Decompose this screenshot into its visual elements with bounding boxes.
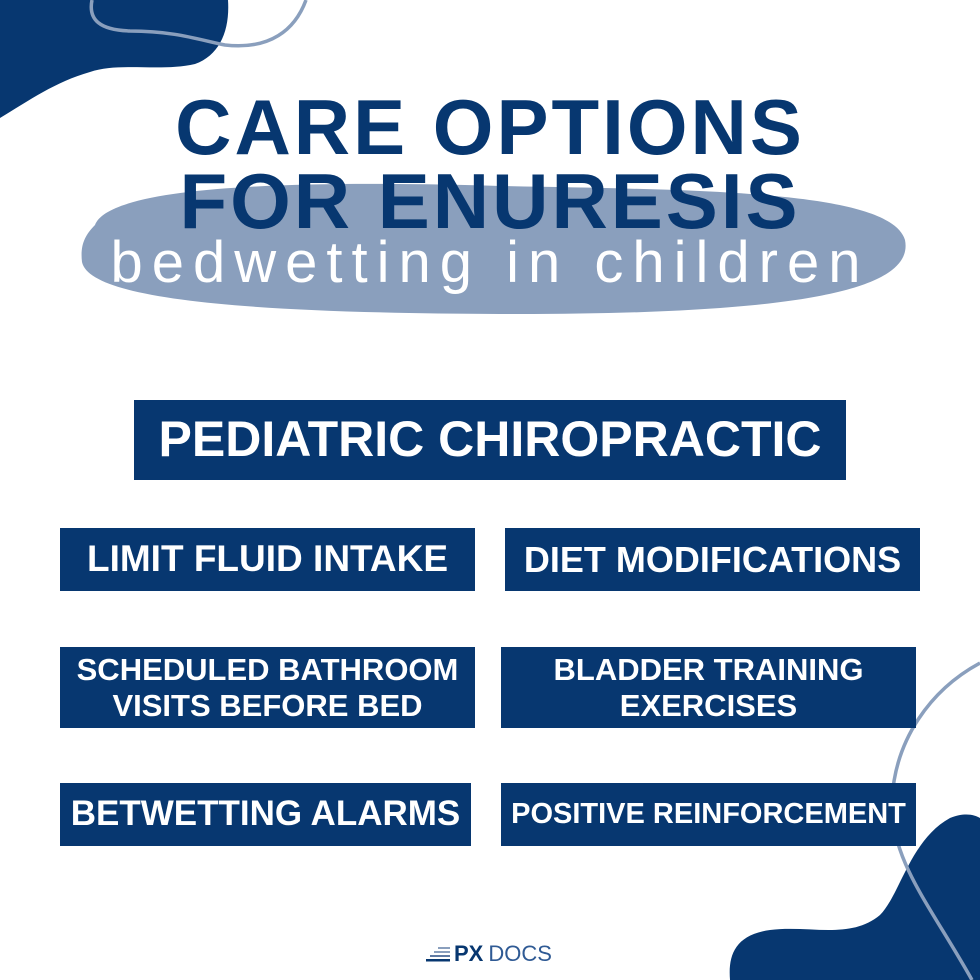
box: positive reinforcement: POSITIVE REINFORCEMENT xyxy=(511,798,906,830)
box: diet modifications xyxy=(505,528,920,591)
box: positive reinforcement xyxy=(501,783,916,846)
box: scheduled bathroom visits xyxy=(60,647,475,728)
box: limit fluid intake xyxy=(60,528,475,591)
logo xyxy=(426,941,552,966)
box: bedwetting alarms xyxy=(60,783,471,846)
title: FOR ENURESIS xyxy=(179,157,801,245)
logo: PX xyxy=(454,941,483,966)
box: bladder training: EXERCISES xyxy=(620,688,797,722)
blob: top-left xyxy=(0,0,228,118)
box: pediatric chiropractic xyxy=(134,400,846,480)
box: bedwetting alarms: BETWETTING ALARMS xyxy=(71,794,460,833)
line: bottom-right arc xyxy=(892,663,980,980)
line: top-left curve xyxy=(91,0,306,46)
box: pediatric chiropractic: PEDIATRIC CHIROPRACTIC xyxy=(159,411,821,467)
title xyxy=(175,83,805,245)
box: scheduled bathroom visits: SCHEDULED BATHROOM xyxy=(77,652,458,687)
box: bladder training: BLADDER TRAINING xyxy=(554,652,864,687)
blob: bottom-right xyxy=(730,815,980,980)
title: CARE OPTIONS xyxy=(175,83,805,171)
box: bladder training xyxy=(501,647,916,728)
box: diet modifications: DIET MODIFICATIONS xyxy=(524,539,901,580)
subtitle swoosh xyxy=(82,184,906,314)
box: scheduled bathroom visits: VISITS BEFORE BED xyxy=(112,688,423,722)
subtitle: bedwetting in children xyxy=(110,230,870,295)
logo: DOCS xyxy=(488,941,552,966)
icon: stair lines xyxy=(426,947,450,962)
box: limit fluid intake: LIMIT FLUID INTAKE xyxy=(87,538,448,579)
